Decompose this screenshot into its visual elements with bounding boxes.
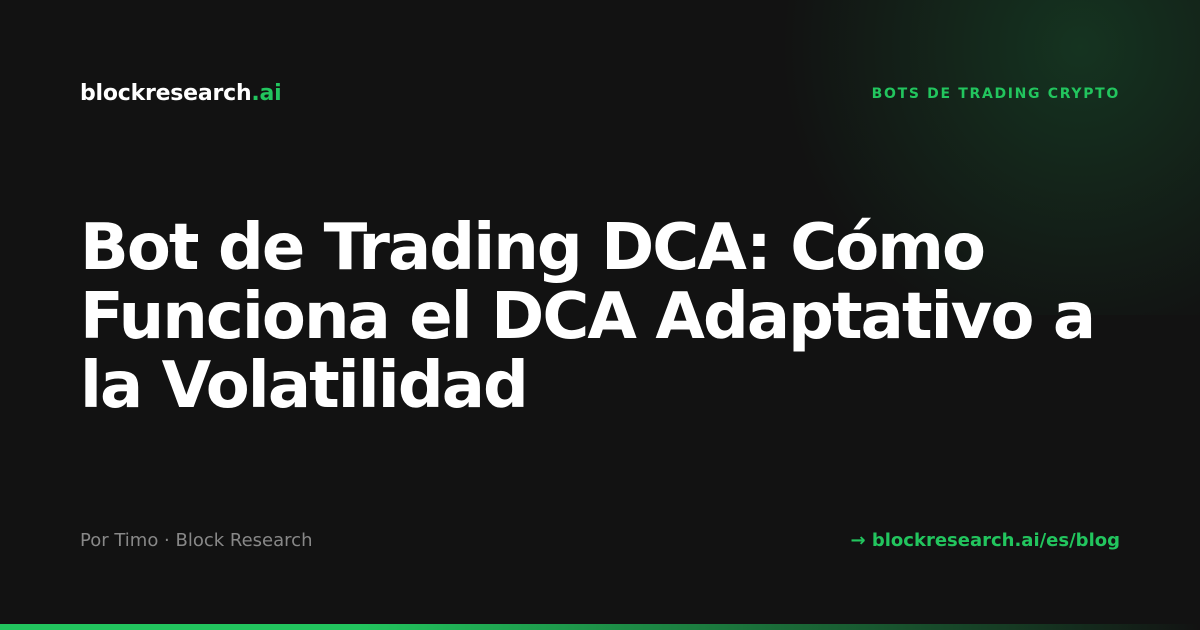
title: Bot de Trading DCA: Cómo	[80, 211, 984, 285]
background glow	[720, 0, 1200, 315]
title: la Volatilidad	[80, 349, 527, 423]
logo: blockresearch.ai	[80, 81, 282, 106]
author: Por Timo · Block Research	[80, 530, 312, 551]
title: Funciona el DCA Adaptativo a	[80, 280, 1094, 354]
category label: BOTS DE TRADING CRYPTO	[872, 86, 1120, 102]
title	[80, 211, 1094, 423]
bottom accent bar	[0, 624, 1200, 630]
blog link: → blockresearch.ai/es/blog	[851, 530, 1120, 551]
